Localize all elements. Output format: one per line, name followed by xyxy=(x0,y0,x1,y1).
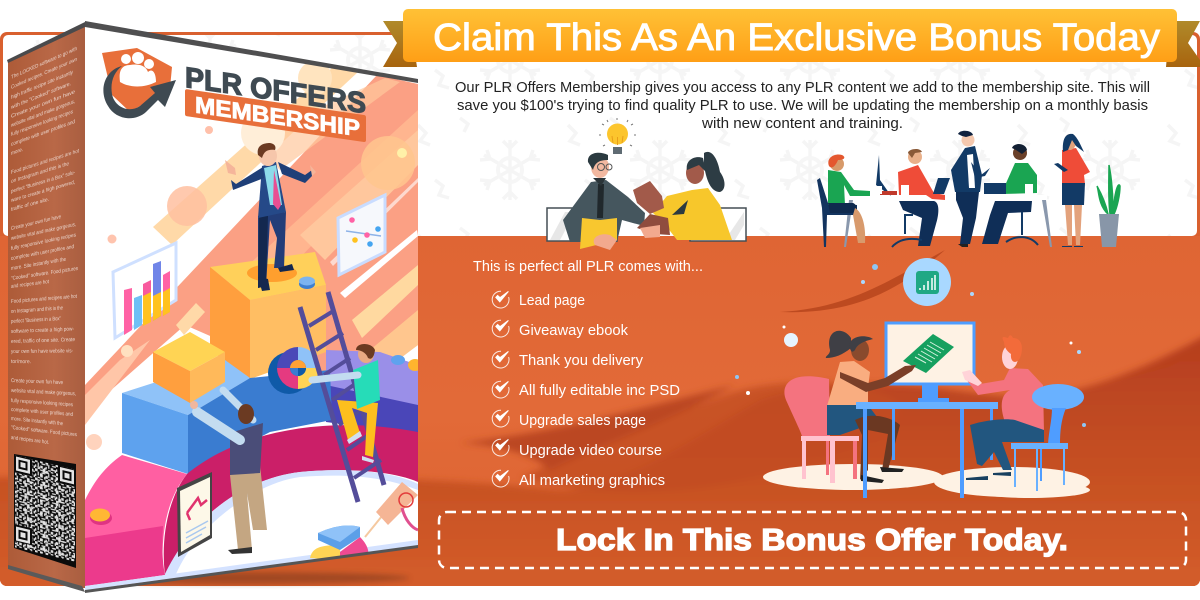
seated woman xyxy=(817,155,897,247)
illustration: office team xyxy=(817,131,1120,247)
call to action xyxy=(439,512,1186,568)
box shadow xyxy=(70,572,410,584)
monitor xyxy=(886,323,974,402)
box side text: complete with user profiles and xyxy=(11,119,75,148)
blue step xyxy=(122,360,250,415)
item: Upgrade sales page: Upgrade sales page xyxy=(519,412,646,429)
box side text xyxy=(10,46,79,446)
box side text: more. Site instantly with the xyxy=(11,416,63,427)
box side text: website vital and make gorgeous, xyxy=(10,222,76,242)
box side text: Create your own fun have xyxy=(11,378,63,386)
logo wordmark: PLR OFFERS xyxy=(185,62,366,120)
box side text: website vital and make gorgeous, xyxy=(10,388,76,397)
box side text: perfect "Business in a Box" xyxy=(11,316,61,325)
box side text: The LOCKED software to go with xyxy=(11,46,77,81)
box side text: complete with user profiles and xyxy=(11,244,74,262)
box front face xyxy=(85,22,422,592)
pink chair xyxy=(784,376,859,483)
light bulb icon xyxy=(599,118,636,154)
intro paragraph xyxy=(455,79,1150,132)
tablet xyxy=(177,472,212,557)
pink step xyxy=(85,455,187,586)
stepped platforms xyxy=(85,252,422,592)
woman in red top xyxy=(1054,134,1090,247)
illustration: handshake xyxy=(547,118,746,250)
box side text: Create your own fun have xyxy=(11,214,61,232)
scatter chart board xyxy=(338,195,385,275)
ribbon tail right xyxy=(1166,21,1200,67)
box side text: Cooked recipes. Create your own xyxy=(11,57,77,91)
box side face xyxy=(7,22,85,592)
man xyxy=(563,153,645,250)
box side text: fully responsive looking recipes xyxy=(11,232,76,252)
item: Giveaway ebook: Giveaway ebook xyxy=(519,322,628,339)
title: Claim This As An Exclusive Bonus Today xyxy=(433,17,1160,59)
isometric cube xyxy=(153,332,225,403)
logo xyxy=(102,48,366,142)
box side text: "Cooked" software. Food pictures xyxy=(11,425,77,438)
box side text: Create your own fun have xyxy=(11,89,75,120)
button text: Lock In This Bonus Offer Today. xyxy=(556,522,1068,557)
blue chair xyxy=(1011,384,1084,491)
person lifting cube xyxy=(190,390,267,554)
box side text: software to create a high pow- xyxy=(11,326,74,335)
illustration: desk scene xyxy=(735,258,1090,498)
ribbon tail left xyxy=(383,21,417,67)
logo emblem xyxy=(102,48,176,118)
woman xyxy=(633,152,732,240)
item: Thank you delivery: Thank you delivery xyxy=(519,352,643,369)
box side text: high traffic recipe site instantly xyxy=(11,70,73,101)
table xyxy=(844,195,1052,247)
box side text: perfect "Business in a Box" solu- xyxy=(11,170,75,195)
box side text: ered, traffic of one site. Create xyxy=(11,337,75,345)
pencil and ruler xyxy=(365,482,418,537)
standing woman navy suit xyxy=(951,131,990,247)
floor blobs xyxy=(763,464,1090,498)
QR code xyxy=(14,454,76,568)
floating dots xyxy=(735,264,1086,427)
intro paragraph: Our PLR Offers Membership gives you access to any PLR content we add to the membership site. This will xyxy=(455,79,1150,96)
box side text: tor/more. xyxy=(11,359,31,365)
diagonal stripes xyxy=(85,67,418,425)
box side text: on Instagram and this is the xyxy=(11,161,69,185)
header ribbon xyxy=(383,9,1200,67)
box side text: with the "Cooked" software. xyxy=(10,81,71,111)
bar chart board xyxy=(113,243,176,338)
box side text: website vital and make gorgeous, xyxy=(10,99,75,129)
checklist xyxy=(492,291,680,489)
box side text: Food pictures and recipes are hot xyxy=(11,148,79,176)
item: Lead page: Lead page xyxy=(519,292,585,309)
magenta arc xyxy=(164,425,418,575)
box side text: and recipes are hot. xyxy=(11,435,49,446)
logo wordmark: MEMBERSHIP xyxy=(195,92,360,141)
donut chart xyxy=(268,347,319,394)
dashed button outline xyxy=(439,512,1186,568)
box side text: more. xyxy=(11,147,23,157)
small pie chart xyxy=(310,525,368,562)
ribbon bar xyxy=(403,9,1177,62)
item: Upgrade video course: Upgrade video course xyxy=(519,442,662,459)
box side text: more. Site instantly with the xyxy=(11,257,66,272)
box side text: your own fun have website vis- xyxy=(11,348,73,355)
chart icon badge xyxy=(903,258,951,306)
box side text: on Instagram and this is the xyxy=(11,305,63,315)
item: All fully editable inc PSD: All fully editable inc PSD xyxy=(519,382,680,399)
document xyxy=(903,334,954,373)
desk xyxy=(856,402,998,498)
panel: product box xyxy=(7,21,422,593)
box side text: "Cooked" software. Food pictures xyxy=(11,266,78,282)
purple step xyxy=(326,350,418,410)
man in green sweater xyxy=(982,144,1038,245)
item: All marketing graphics: All marketing graphics xyxy=(519,472,665,489)
plant xyxy=(1097,165,1120,247)
list heading: This is perfect all PLR comes with... xyxy=(473,259,703,275)
box side text: Food pictures and recipes are hot xyxy=(11,294,77,305)
decorative circles xyxy=(86,61,415,450)
ladder xyxy=(300,292,384,502)
intro paragraph: save you $100's trying to find quality PLR to use. We will be updating the membership on a monthly basis xyxy=(457,97,1148,114)
box side text: fully responsive looking recipes xyxy=(11,398,73,408)
box side text: and recipes are hot xyxy=(11,279,49,290)
seated man xyxy=(962,335,1044,480)
man in red sweater xyxy=(892,149,950,247)
box side text: traffic of one site. xyxy=(11,197,49,213)
box side text: fully responsive looking recipes xyxy=(11,109,73,138)
box side text: ware to create a high powered, xyxy=(10,179,75,204)
item: Lead page xyxy=(492,291,585,309)
businessman xyxy=(225,143,316,291)
box side text: complete with user profiles and xyxy=(11,407,73,418)
box front edges xyxy=(85,21,418,593)
intro paragraph: with new content and training. xyxy=(701,115,903,132)
seated woman xyxy=(826,331,916,483)
person on ladder xyxy=(312,344,380,463)
yellow pedestal xyxy=(210,252,326,379)
monitors xyxy=(547,208,746,241)
